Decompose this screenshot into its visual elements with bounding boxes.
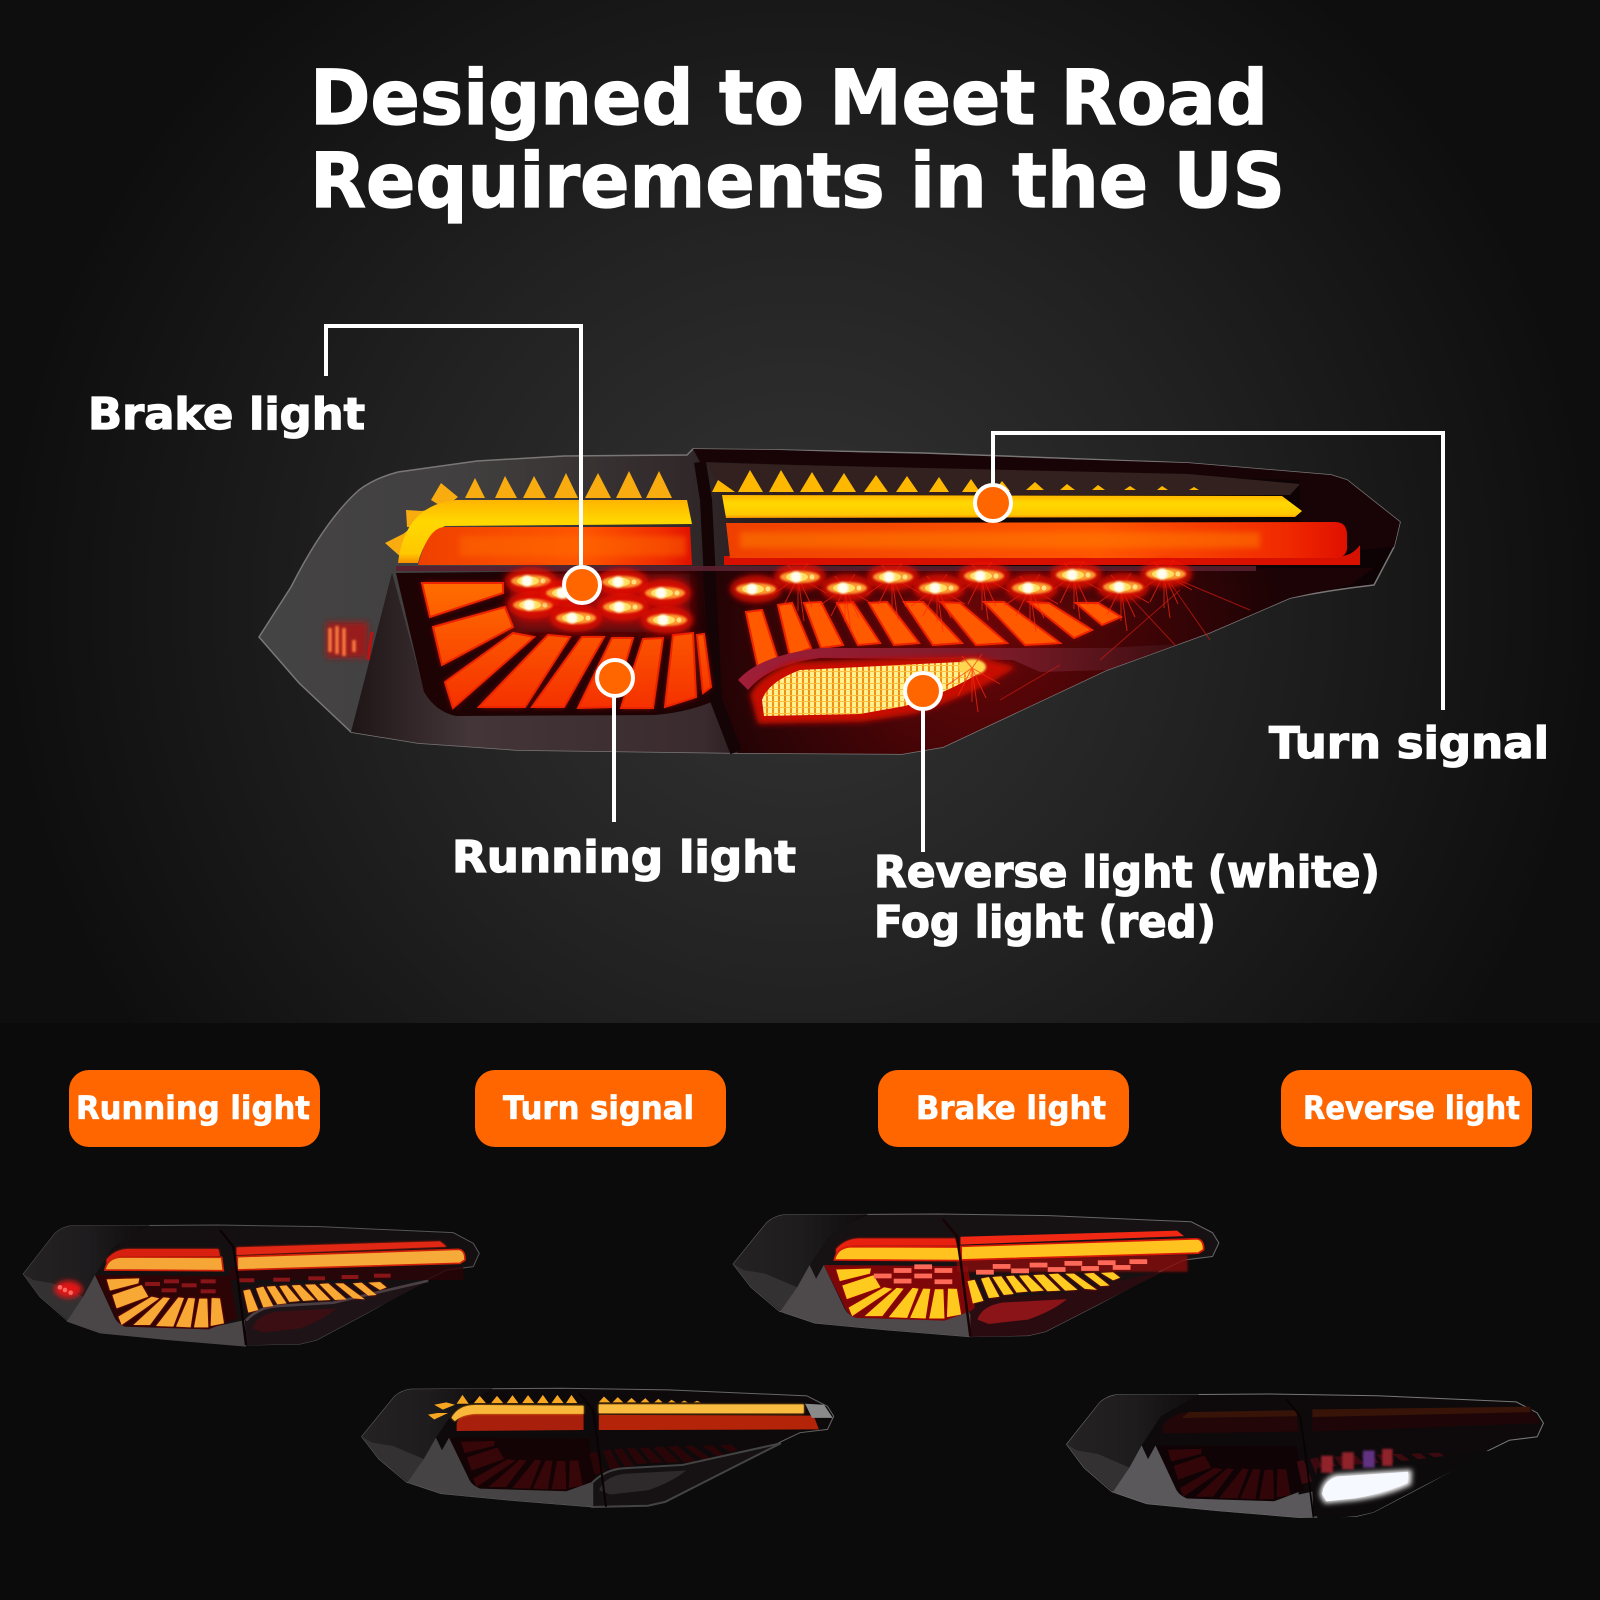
label: brake light: Brake light: [88, 389, 365, 440]
marker: brake light: [564, 567, 600, 603]
left LED cluster: [505, 567, 693, 634]
right red strip: [724, 545, 1360, 565]
title: Requirements in the US: [310, 136, 1285, 225]
callout: brake light leader line: [326, 326, 581, 575]
left LED matrix red glow: [510, 574, 690, 632]
pill: brake light: [878, 1070, 1129, 1147]
small lamp: reverse light state: [1067, 1394, 1543, 1519]
marker: running light: [597, 660, 633, 696]
marker: turn signal: [975, 485, 1011, 521]
left running stripe: [460, 536, 686, 556]
pill: reverse light: [1281, 1070, 1532, 1147]
pill: running light: Running light: [76, 1089, 310, 1127]
callout: running light leader line: [612, 690, 616, 822]
marker: reverse light: [905, 673, 941, 709]
label: reverse and fog light: Fog light (red): [874, 897, 1216, 948]
fog hot spot: [958, 659, 986, 675]
right running stripe: [740, 532, 1260, 548]
label: running light: Running light: [452, 832, 796, 883]
top dark smoked strip: [693, 449, 1400, 555]
pill: turn signal: Turn signal: [503, 1089, 694, 1127]
right turn arrows: [712, 470, 1199, 492]
reverse fog LED grid: [762, 662, 984, 716]
left amber bar: [398, 500, 692, 563]
left turn arrows: [385, 471, 672, 558]
left red bar glow: [418, 527, 692, 565]
pill: running light: [69, 1070, 320, 1147]
module divider: [700, 462, 736, 752]
small lamp: brake light state: [733, 1214, 1219, 1338]
reverse fog light glow: [750, 656, 1016, 724]
label: reverse and fog light: Reverse light (white): [874, 847, 1380, 898]
pill: turn signal: [475, 1070, 726, 1147]
lower right lens: [700, 568, 1374, 754]
fog band: [738, 644, 1180, 690]
pill: brake light: Brake light: [916, 1089, 1106, 1127]
callout: turn signal leader line: [993, 433, 1443, 710]
label: turn signal: Turn signal: [1269, 718, 1549, 769]
right fan blades: [746, 602, 1121, 668]
blade glow: [422, 583, 1121, 708]
lens divider line: [396, 566, 1256, 571]
label: reverse and fog light: [874, 847, 1380, 948]
background panel: bottom dark: [0, 1023, 1600, 1600]
right yellow bar: [722, 495, 1302, 518]
small lamp: running light state: [23, 1225, 479, 1347]
left inner dark fin: [353, 573, 424, 730]
fin light glow: [368, 632, 372, 660]
pill: reverse light: Reverse light: [1303, 1089, 1520, 1127]
left fan blades: [422, 583, 711, 708]
smoked gray strip behind turn arrows: [706, 463, 1300, 495]
background panel: top gradient: [0, 0, 1600, 1023]
bottom smoked band: [351, 573, 742, 753]
main tail light product illustration: [259, 449, 1400, 754]
title: [310, 53, 1285, 225]
lamp body shell: [259, 449, 1400, 754]
side marker red light: [326, 622, 368, 658]
title: Designed to Meet Road: [310, 53, 1268, 142]
callout: reverse light leader line: [921, 700, 925, 852]
lower left lens: [396, 570, 716, 716]
right red bar: [726, 522, 1347, 558]
right LED row: [730, 560, 1192, 603]
small lamp: turn signal state: [362, 1388, 834, 1508]
starburst rays: [772, 560, 1250, 712]
